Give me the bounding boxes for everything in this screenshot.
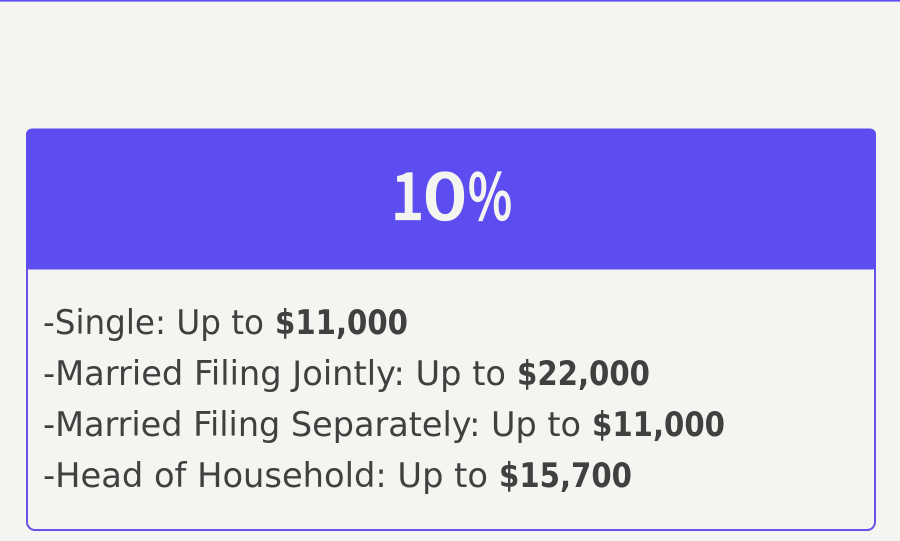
heading: 10%: 1 xyxy=(391,148,424,238)
line: single: $11,000 xyxy=(275,303,408,342)
line: married filing separately: -Married Filing Separately: Up to xyxy=(43,405,581,444)
line: head of household: $15,700 xyxy=(499,456,632,495)
line: head of household: -Head of Household: Up to xyxy=(43,456,488,495)
panel: 10% tax bracket xyxy=(26,128,876,530)
line: single: -Single: Up to xyxy=(43,303,264,342)
line: married filing jointly: $22,000 xyxy=(517,354,650,393)
line: single xyxy=(43,303,408,342)
header band xyxy=(26,128,876,270)
heading: 10%: 0 xyxy=(423,148,467,238)
line: married filing separately: $11,000 xyxy=(592,405,725,444)
heading: 10%: % xyxy=(468,148,512,238)
panel body outline xyxy=(27,200,875,530)
line: married filing jointly: -Married Filing Jointly: Up to xyxy=(43,354,506,393)
text block: filing status limits xyxy=(43,303,725,495)
